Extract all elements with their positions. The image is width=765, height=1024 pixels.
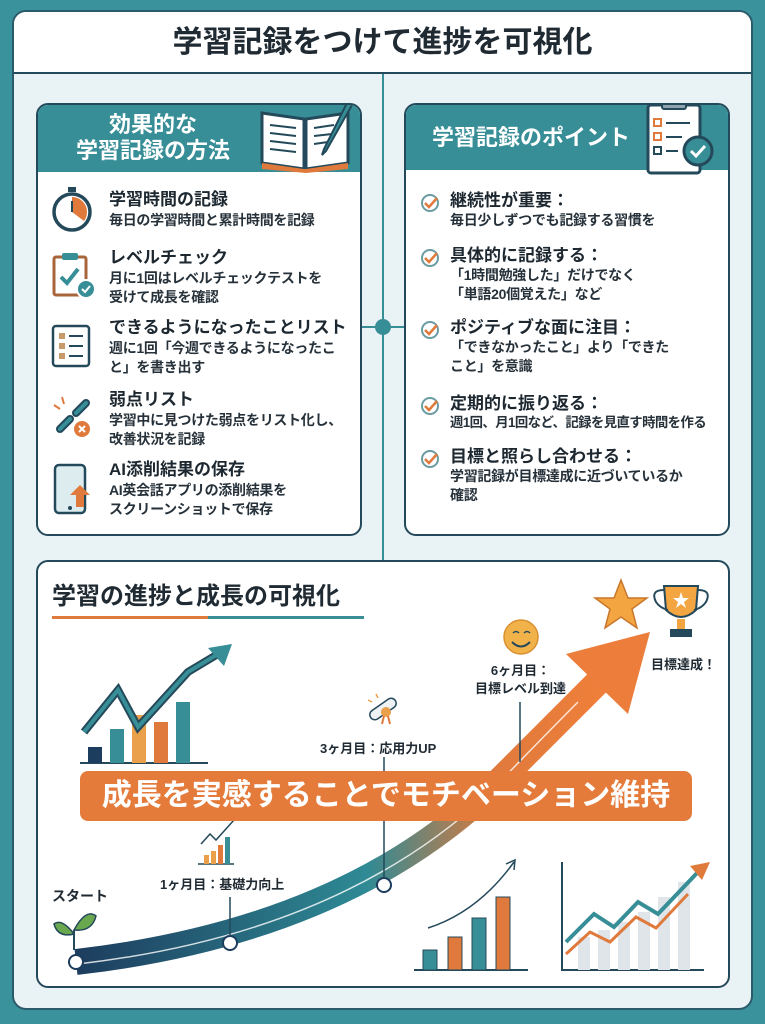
point: concrete: 具体的に記録する： <box>450 246 603 265</box>
title bar: 学習記録をつけて進捗を可視化 <box>172 26 592 59</box>
item: can-do list: 週に1回「今週できるようになったこ <box>109 340 335 356</box>
panel header: 学習記録の方法 <box>76 138 230 163</box>
icon: small chart <box>198 820 234 864</box>
item: weakness list: 弱点リスト <box>109 390 194 409</box>
icon: stopwatch <box>52 187 92 232</box>
point: positive: こと」を意識 <box>450 358 532 374</box>
label: goal achieved: 目標達成！ <box>651 657 716 672</box>
point: concrete: 「1時間勉強した」だけでなく <box>450 267 636 283</box>
panel header: 効果的な <box>109 112 197 137</box>
icon: open book <box>260 105 353 173</box>
icon: list <box>52 324 90 368</box>
panel: recording points <box>404 103 730 536</box>
panel: effective recording methods <box>36 103 362 536</box>
icon: star <box>595 580 647 628</box>
item: level check: 受けて成長を確認 <box>109 288 219 304</box>
item: AI correction <box>54 460 287 516</box>
item: AI correction: スクリーンショットで保存 <box>109 500 273 516</box>
point: continuity <box>421 191 655 228</box>
banner: motivation <box>80 771 692 821</box>
point: positive: 「できなかったこと」より「できた <box>450 339 669 355</box>
title bar <box>14 12 751 74</box>
item: AI correction: AI添削結果の保存 <box>109 460 245 479</box>
label: 6 months: 目標レベル到達 <box>475 681 566 696</box>
icon: line chart bottom <box>562 862 710 970</box>
label: 3 months: 3ヶ月目：応用力UP <box>320 741 436 756</box>
point: goals: 確認 <box>450 486 477 502</box>
item: study time: 毎日の学習時間と累計時間を記録 <box>109 212 314 228</box>
label: 1 month: 1ヶ月目：基礎力向上 <box>160 877 284 892</box>
item: can-do list: と」を書き出す <box>109 358 205 374</box>
item: weakness list: 学習中に見つけた弱点をリスト化し、 <box>109 412 342 428</box>
icon: smiley <box>504 620 538 654</box>
label: 6 months: 6ヶ月目： <box>491 663 550 678</box>
point: continuity: 毎日少しずつでも記録する習慣を <box>450 212 655 228</box>
item: can-do list <box>52 318 347 374</box>
icon: trophy <box>654 586 708 637</box>
item: weakness list: 改善状況を記録 <box>109 430 205 446</box>
item: study time <box>52 187 314 232</box>
section heading: 学習の進捗と成長の可視化 <box>52 583 340 610</box>
point: positive: ポジティブな面に注目： <box>450 318 636 337</box>
panel header <box>38 105 360 172</box>
icon: broken chain <box>54 396 90 437</box>
item: level check: 月に1回はレベルチェックテストを <box>109 270 322 286</box>
growth arrow <box>69 632 650 969</box>
point: review: 週1回、月1回など、記録を見直す時間を作る <box>450 415 706 430</box>
point: concrete <box>421 246 636 302</box>
point: review: 定期的に振り返る： <box>450 394 603 413</box>
panel header <box>406 105 728 170</box>
point: goals: 目標と照らし合わせる： <box>450 447 637 466</box>
icon: phone upload <box>54 464 90 514</box>
point: review <box>421 394 706 430</box>
item: can-do list: できるようになったことリスト <box>109 318 347 337</box>
connector node <box>375 319 391 335</box>
label: 6 months <box>475 663 566 696</box>
point: continuity: 継続性が重要： <box>450 191 569 210</box>
item: level check: レベルチェック <box>109 248 228 267</box>
connector horizontal <box>362 326 404 328</box>
point: positive <box>421 318 669 374</box>
item: study time: 学習時間の記録 <box>109 190 228 209</box>
item: AI correction: AI英会話アプリの添削結果を <box>109 482 287 498</box>
heading underline <box>52 616 364 619</box>
point: goals <box>421 447 682 502</box>
point: concrete: 「単語20個覚えた」など <box>450 286 602 302</box>
label: start: スタート <box>52 888 108 904</box>
icon: large bar chart with arrow <box>80 644 232 763</box>
point: goals: 学習記録が目標達成に近づいているか <box>450 468 682 484</box>
icon: bar chart bottom <box>414 860 528 970</box>
banner: motivation: 成長を実感することでモチベーション維持 <box>102 779 670 812</box>
milestone stems <box>230 702 520 936</box>
icon: diploma <box>368 694 398 724</box>
item: level check <box>52 248 322 304</box>
center connector line <box>382 74 384 560</box>
panel: progress visualization <box>36 560 730 988</box>
item: weakness list <box>54 390 342 446</box>
panel header: 学習記録のポイント <box>432 125 630 150</box>
icon: sprout <box>54 914 96 950</box>
icon: checklist clipboard <box>646 105 714 174</box>
icon: clipboard check <box>52 253 94 297</box>
